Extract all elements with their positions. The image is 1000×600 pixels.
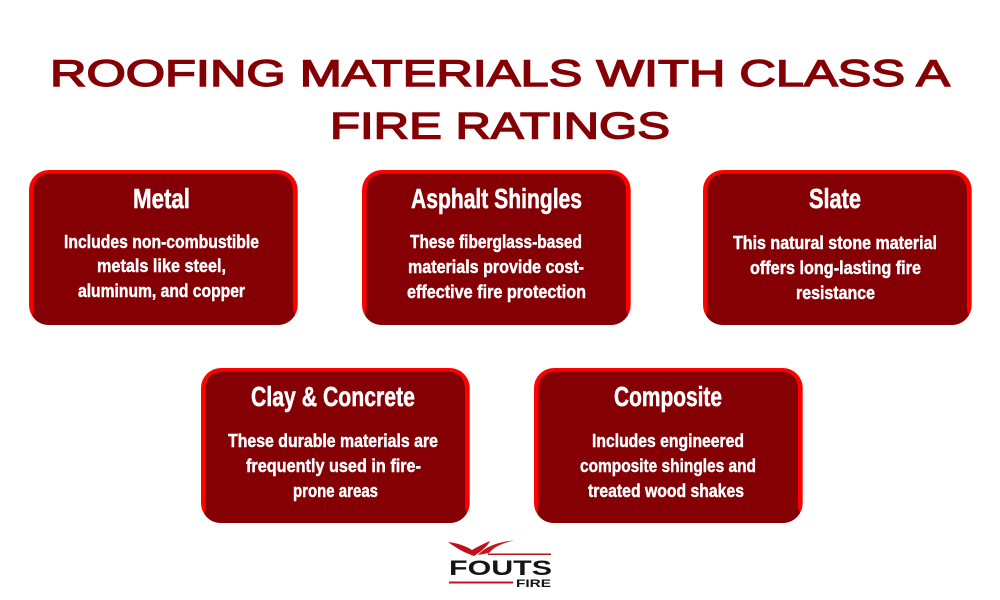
panel: metal: metals like steel,	[97, 255, 226, 276]
title: FIRE RATINGS	[330, 104, 670, 146]
panel: metal: Metal	[133, 183, 190, 214]
panel: asphalt shingles: Asphalt Shingles	[411, 183, 582, 214]
panel: slate: This natural stone material	[733, 232, 937, 253]
logo: fouts fire: FOUTS	[449, 557, 552, 580]
panel: composite	[534, 368, 803, 523]
panel: composite: Includes engineered	[592, 430, 744, 451]
title: ROOFING MATERIALS WITH CLASS A	[50, 52, 950, 94]
panel: metal	[29, 170, 298, 325]
panel: clay and concrete: prone areas	[293, 480, 378, 501]
panel: clay and concrete: frequently used in fire-	[246, 455, 421, 476]
panel: clay and concrete: Clay & Concrete	[251, 381, 415, 412]
panel: asphalt shingles: effective fire protection	[407, 281, 586, 302]
panel: composite: treated wood shakes	[588, 480, 744, 501]
panel: slate: offers long-lasting fire	[750, 257, 921, 278]
panel: clay and concrete	[201, 368, 470, 523]
panel: asphalt shingles	[362, 170, 631, 325]
title	[50, 52, 950, 146]
panel: slate	[703, 170, 972, 325]
panel: slate: resistance	[796, 282, 875, 303]
panel: metal: Includes non-combustible	[64, 231, 259, 252]
panel: composite: composite shingles and	[580, 455, 756, 476]
panel: composite: Composite	[614, 381, 722, 412]
panel: metal: aluminum, and copper	[78, 280, 245, 301]
panel: clay and concrete: These durable materials are	[228, 430, 438, 451]
panel: asphalt shingles: These fiberglass-based	[410, 231, 582, 252]
logo: fouts fire: FIRE	[516, 578, 551, 590]
panel: slate: Slate	[809, 183, 861, 214]
logo: fouts fire	[448, 540, 552, 590]
panel: asphalt shingles: materials provide cost-	[408, 256, 584, 277]
